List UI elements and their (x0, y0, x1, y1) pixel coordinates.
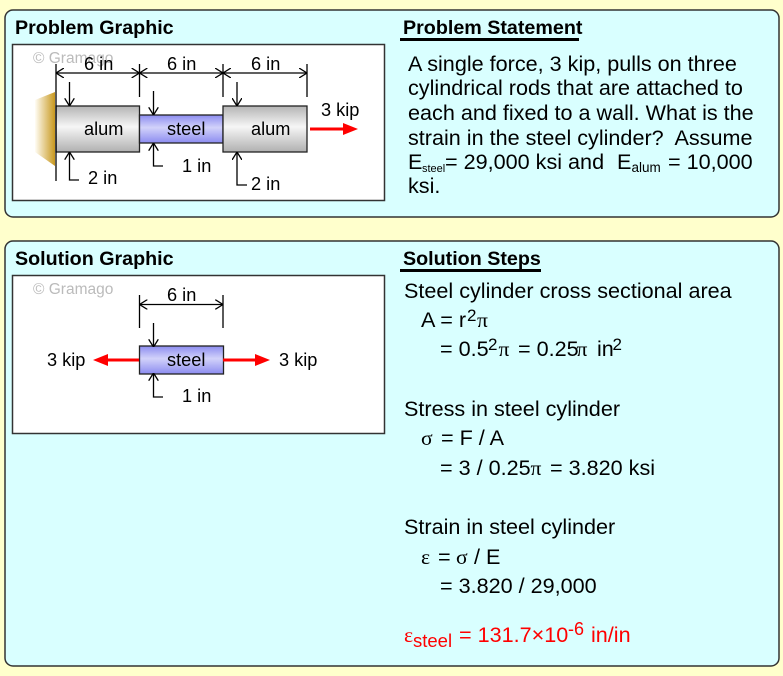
problem text: = 10,000 (668, 149, 753, 174)
watermark: © Gramago (33, 50, 113, 67)
step: area: A = r (421, 307, 466, 332)
alum rod right (223, 106, 307, 152)
dimension labels: 2 in (88, 168, 117, 188)
step: area: 2 (467, 306, 476, 325)
problem text: E (408, 149, 422, 174)
step: area: 2 (612, 335, 622, 354)
labels: steel (167, 350, 205, 370)
dimension labels: 6 in (84, 54, 113, 74)
step: stress: = 3.820 ksi (550, 455, 655, 480)
dimension labels: 2 in (251, 174, 280, 194)
steel rod (140, 115, 223, 143)
panel: solution (5, 241, 779, 666)
result: ε (404, 623, 413, 647)
step: area: π (498, 337, 510, 361)
dimension labels: steel (167, 119, 205, 139)
dimension labels: alum (251, 119, 290, 139)
result: = 131.7×10 (459, 622, 568, 647)
step: area: π (477, 308, 488, 332)
heading: problem graphic: Problem Graphic (15, 17, 174, 39)
heading: problem statement: Problem Statement (403, 17, 583, 39)
problem text: = 29,000 ksi and (445, 149, 604, 174)
dimension labels: alum (84, 119, 123, 139)
labels: 3 kip (279, 350, 317, 370)
problem diagram (12, 44, 384, 200)
step: strain: = 3.820 / 29,000 (440, 573, 597, 598)
solution diagram (12, 276, 384, 434)
step: stress: π (530, 456, 542, 480)
step: area: = 0.5 (440, 336, 489, 361)
dimension labels (84, 54, 359, 194)
labels (47, 285, 317, 406)
problem text: A single force, 3 kip, pulls on three (408, 51, 737, 76)
step: strain: / E (474, 544, 500, 569)
dimension lines (56, 64, 307, 185)
arrow: right force (223, 354, 270, 366)
step: area: = 0.25 (518, 336, 579, 361)
heading: solution steps: Solution Steps (403, 248, 541, 270)
problem text: ksi. (408, 173, 440, 198)
result: in/in (591, 622, 631, 647)
step: stress: = 3 / 0.25 (440, 455, 531, 480)
problem text: E (617, 149, 631, 174)
problem text: cylindrical rods that are attached to (408, 75, 743, 100)
step: stress: σ (421, 426, 433, 450)
alum rod left (56, 106, 140, 152)
step: area: Steel cylinder cross sectional area (404, 278, 733, 303)
step: area (404, 278, 733, 361)
watermark: © Gramago (33, 281, 113, 298)
dimension labels: 6 in (167, 54, 196, 74)
labels: 3 kip (47, 350, 85, 370)
step: strain: ε (421, 545, 430, 569)
result: -6 (568, 619, 584, 639)
dimension labels: 1 in (182, 156, 211, 176)
arrow: left force (93, 354, 139, 366)
labels: 6 in (167, 285, 196, 305)
problem text: each and fixed to a wall. What is the (408, 100, 754, 125)
problem text (408, 51, 754, 198)
dimension lines (140, 295, 223, 397)
dimension labels: 6 in (251, 54, 280, 74)
icon: wall (35, 92, 55, 166)
step: stress: Stress in steel cylinder (404, 396, 620, 421)
labels: 1 in (182, 386, 211, 406)
steel rod (140, 346, 224, 374)
heading: solution graphic: Solution Graphic (15, 248, 174, 270)
step: strain: σ (456, 545, 468, 569)
step: strain: Strain in steel cylinder (404, 514, 615, 539)
step: stress (404, 396, 655, 480)
problem text: strain in the steel cylinder? Assume (408, 125, 752, 150)
result: steel (413, 630, 452, 651)
step: strain (404, 514, 615, 598)
step: area: π (576, 337, 588, 361)
dimension labels: 3 kip (321, 100, 359, 120)
step: strain: = (438, 544, 451, 569)
step: stress: = F / A (441, 425, 505, 450)
step: area: 2 (488, 335, 497, 354)
arrow: 3 kip force (310, 123, 358, 135)
panel: problem (5, 10, 779, 217)
problem text: alum (632, 160, 661, 175)
step: area: in (597, 336, 614, 361)
problem text: steel (422, 163, 445, 175)
